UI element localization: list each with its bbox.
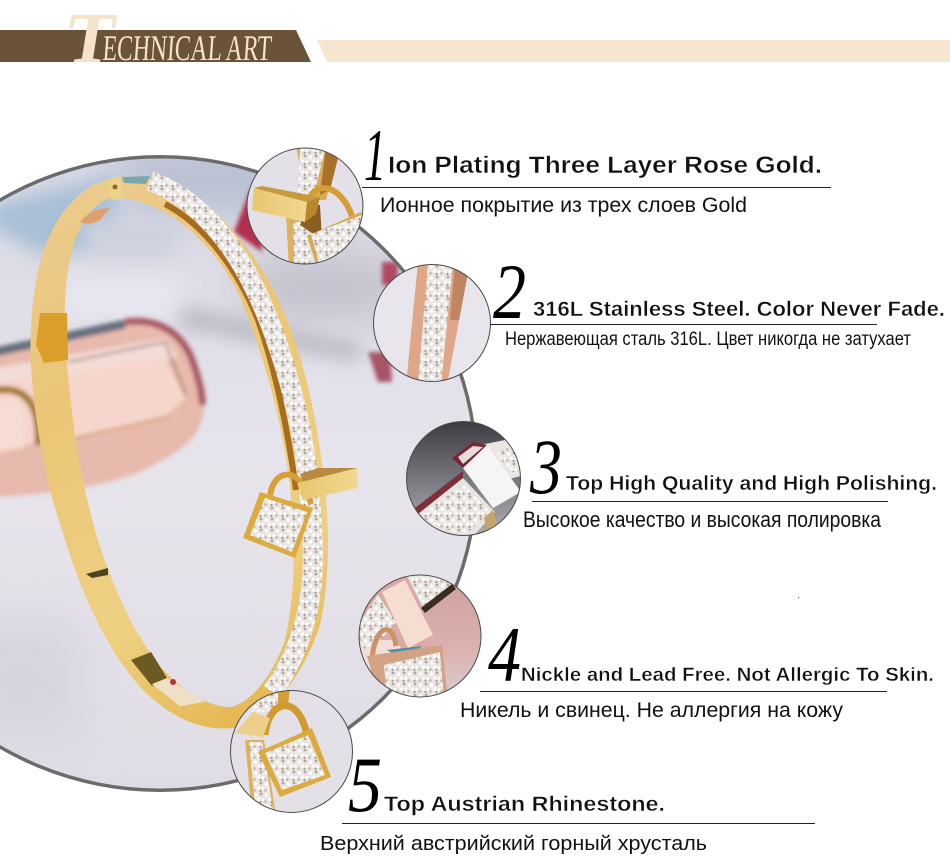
- feature 3 text: Top High Quality and High Polishing.: [566, 473, 937, 495]
- feature 5 text: [320, 741, 815, 855]
- feature 4 text: [460, 611, 934, 722]
- feature 2 text: 2: [493, 248, 526, 335]
- feature 3 text: [523, 423, 937, 532]
- inset 5: padlock close-up: [230, 688, 352, 815]
- feature 5 text: Top Austrian Rhinestone.: [384, 793, 665, 816]
- feature 3 text: 3: [529, 423, 562, 510]
- feature 1 text: 1: [364, 115, 386, 197]
- feature 3 text: Высокое качество и высокая полировка: [523, 507, 882, 532]
- feature 2 text: [490, 248, 945, 350]
- feature 2 text: 316L Stainless Steel. Color Never Fade.: [533, 298, 945, 321]
- stray dot: [798, 597, 799, 598]
- lipstick shape body: [0, 321, 204, 497]
- feature 1 text: [362, 115, 831, 217]
- large circular product photo: [0, 150, 490, 800]
- feature 1 text: Ионное покрытие из трех слоев Gold: [380, 194, 747, 217]
- feature 4 text: 4: [488, 611, 521, 698]
- padlock charm on bangle: [243, 468, 358, 558]
- feature 4 text: Никель и свинец. Не аллергия на кожу: [460, 699, 843, 722]
- header banner: [0, 0, 950, 78]
- feature 5 text: 5: [348, 741, 382, 828]
- inset 2: band close-up: [374, 262, 490, 385]
- inset 1: lock clasp close-up: [246, 148, 364, 264]
- inset 3: polished edge close-up: [406, 422, 525, 540]
- gold bangle bracelet: [30, 176, 328, 728]
- feature 4 text: Nickle and Lead Free. Not Allergic To Skin.: [521, 665, 934, 686]
- header banner: ECHNICAL ART: [101, 28, 273, 68]
- inset 4: rose gold lock close-up: [358, 574, 482, 698]
- feature 1 text: Ion Plating Three Layer Rose Gold.: [388, 152, 822, 179]
- bangle reflections: [36, 176, 205, 706]
- feature 5 text: Верхний австрийский горный хрусталь: [320, 833, 707, 855]
